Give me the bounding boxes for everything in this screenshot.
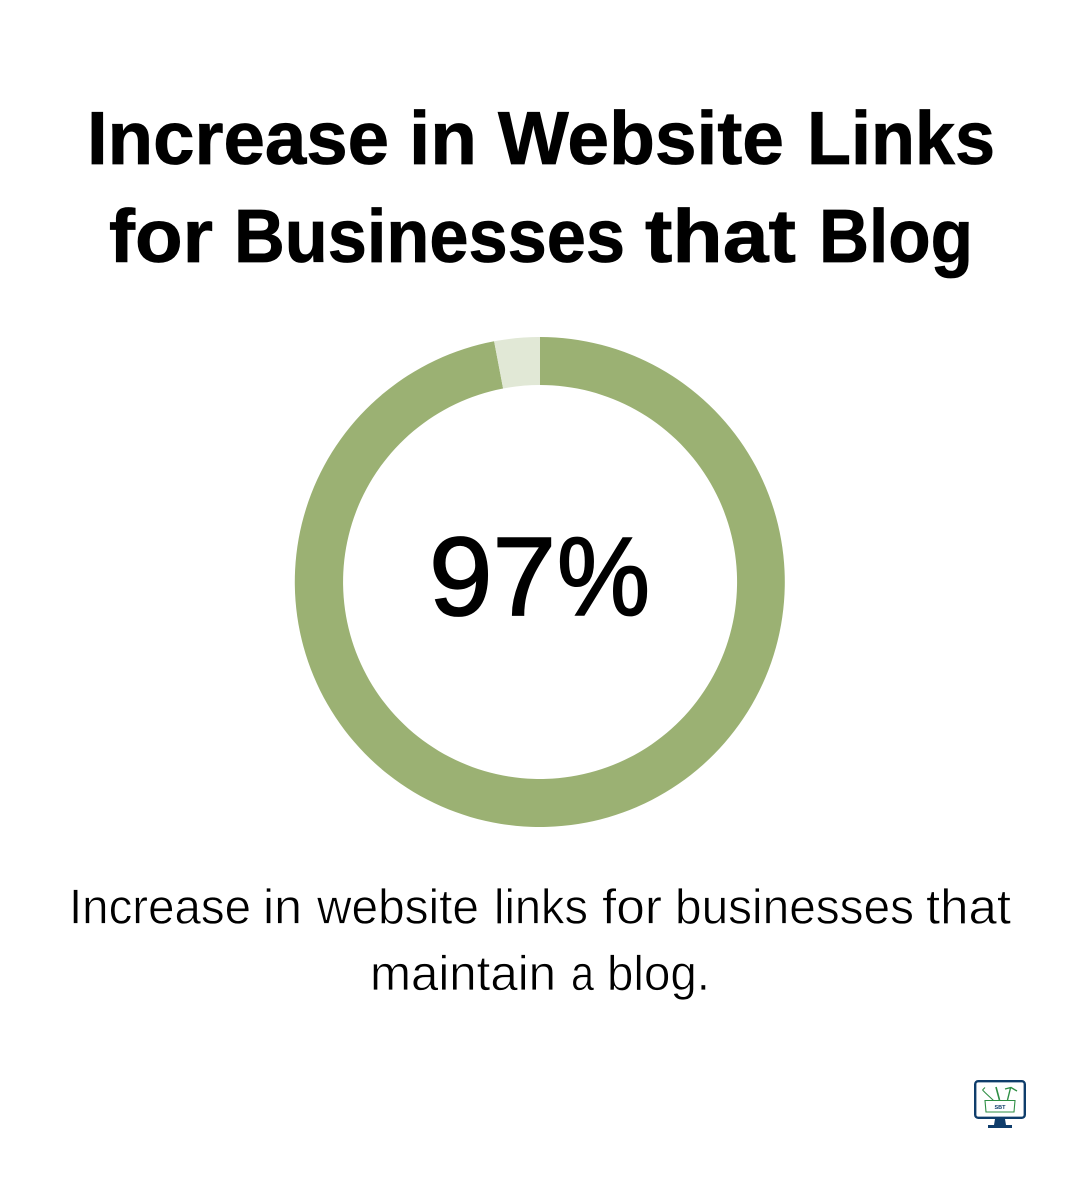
title: Links [807, 96, 995, 180]
caption [69, 880, 1011, 1001]
monitor screen [975, 1081, 1025, 1118]
title: Increase [87, 96, 389, 180]
caption: businesses [675, 880, 914, 934]
monitor stand [988, 1119, 1012, 1128]
caption: blog. [607, 947, 710, 1001]
value: 97%: 97 [429, 515, 556, 639]
title: Website [498, 96, 784, 180]
caption: that [926, 880, 1011, 934]
logo label: SBT [994, 1105, 1006, 1111]
donut segment: 97% [295, 337, 785, 827]
value: 97% [429, 515, 650, 639]
caption: a [571, 947, 595, 1001]
title [87, 96, 995, 278]
caption: links [494, 880, 588, 934]
title: in [409, 96, 477, 180]
title: Blog [819, 194, 973, 278]
donut chart [295, 337, 785, 827]
toolbox [982, 1087, 1017, 1112]
caption: for [602, 880, 662, 934]
title: for [109, 194, 213, 278]
caption: maintain [370, 947, 556, 1001]
value: 97%: % [557, 515, 650, 639]
title: Businesses [234, 194, 625, 278]
title: that [645, 194, 796, 278]
donut segment: remaining 3% [494, 337, 540, 388]
caption: in [263, 880, 302, 934]
icon: logo monitor with toolbox [975, 1081, 1025, 1128]
caption: website [316, 880, 479, 934]
caption: Increase [69, 880, 251, 934]
